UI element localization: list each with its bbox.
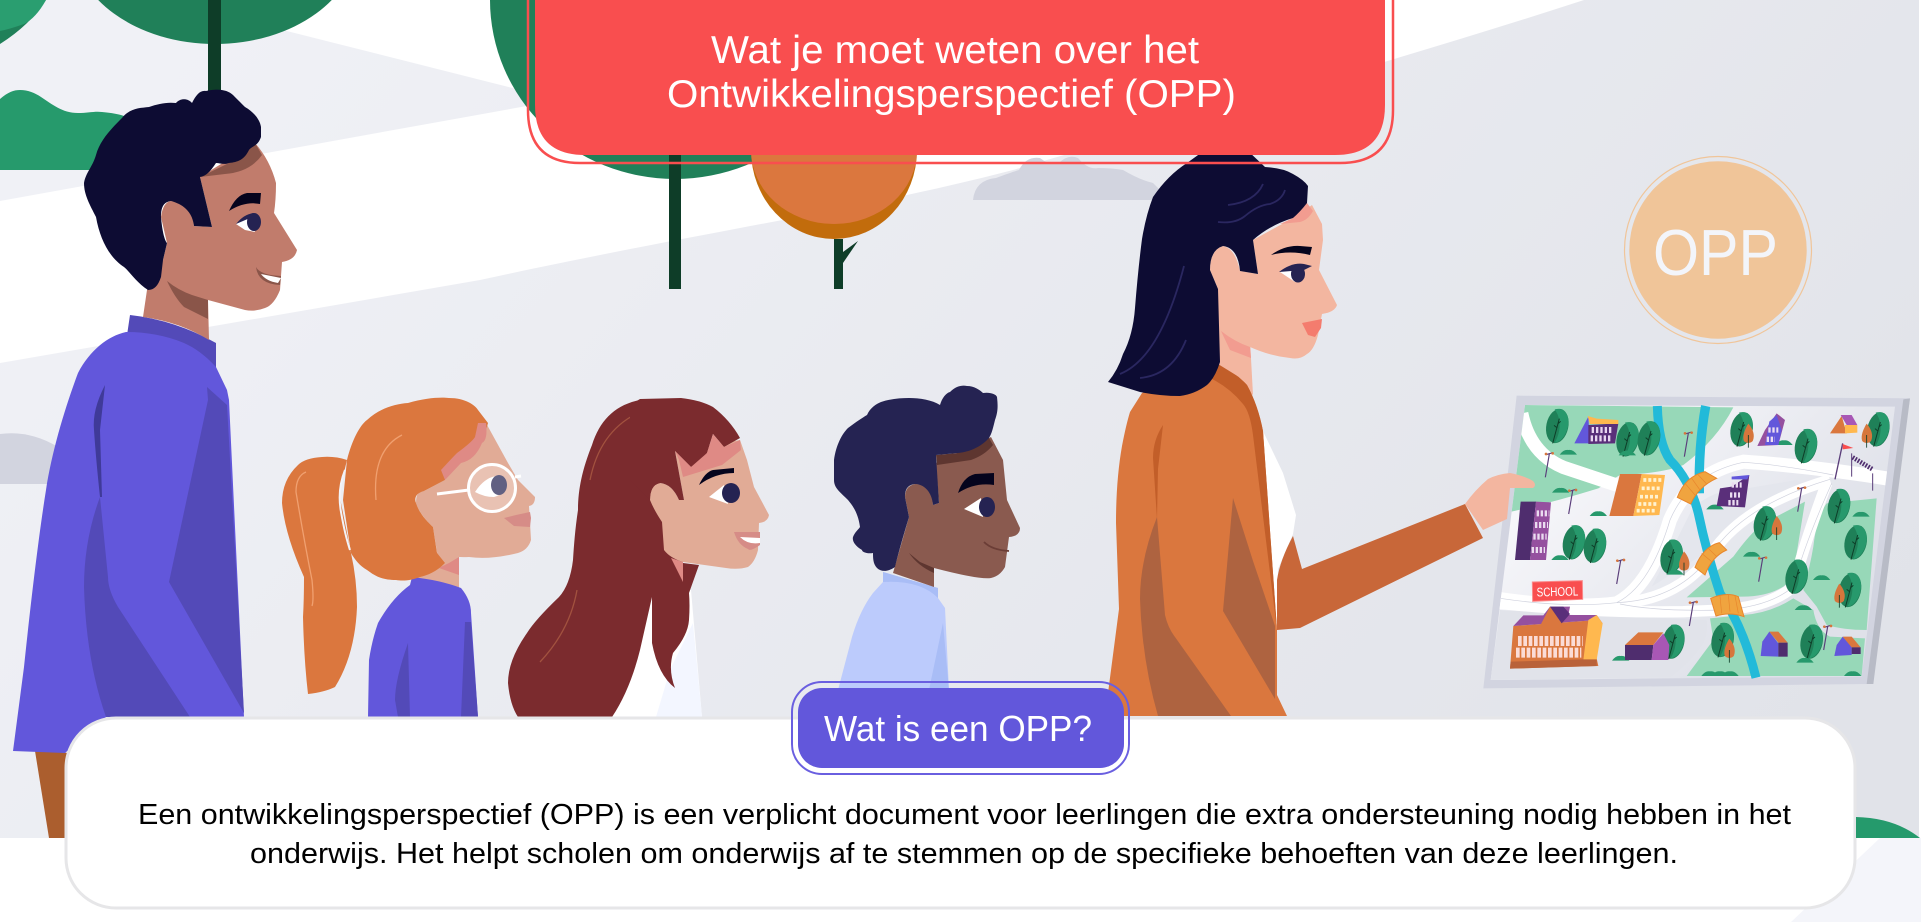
smile (984, 542, 1009, 551)
neck (412, 552, 459, 592)
section pill: Wat is een OPP? (824, 708, 1092, 749)
mouth (504, 512, 531, 527)
smile (734, 532, 760, 550)
long hair (508, 400, 699, 717)
face (650, 440, 769, 569)
hair (84, 90, 261, 290)
person: woman in orange jacket (1105, 150, 1483, 716)
building: tall purple (1515, 502, 1551, 560)
person: boy in light blue (834, 386, 1020, 690)
building: top centre tower (1757, 413, 1785, 446)
face (893, 437, 1020, 587)
section pill (792, 682, 1129, 774)
shirt (612, 590, 702, 717)
hair (834, 386, 998, 571)
shirt shading (169, 387, 244, 713)
hairline (675, 434, 741, 477)
shirt (368, 577, 478, 717)
hair highlights (540, 412, 640, 662)
building: top left purple (1574, 416, 1618, 444)
cloud: center (973, 157, 1170, 200)
OPP badge: OPP (1653, 216, 1778, 289)
eye (475, 476, 506, 497)
trousers (35, 751, 70, 838)
title line 1: Wat je moet weten over het (711, 29, 1199, 72)
eye and brow (1271, 246, 1312, 282)
banner fill (535, 0, 1385, 155)
river (1657, 406, 1756, 678)
bush: bottom right (1856, 817, 1920, 838)
gray ground (1491, 610, 1618, 680)
building: centre yellow (1609, 474, 1665, 516)
bush: left (0, 90, 130, 170)
shirt (13, 332, 244, 753)
hair highlight (376, 435, 402, 500)
roads (1483, 413, 1897, 612)
map frame (1483, 396, 1910, 688)
map bushes (1551, 440, 1870, 676)
info card (66, 718, 1855, 908)
ponytail highlight (296, 472, 313, 606)
building: bottom right houses (1761, 632, 1861, 657)
hair strands (1120, 184, 1285, 378)
person: man in purple (13, 90, 297, 838)
building: top right house (1830, 415, 1857, 433)
neck (671, 558, 683, 582)
shirt (1260, 429, 1296, 640)
collar (126, 315, 216, 372)
title banner (528, 0, 1393, 163)
map paper (1491, 405, 1895, 680)
smile (256, 267, 281, 285)
banner outline (528, 0, 1393, 163)
eye and brow (229, 193, 261, 232)
face and neck (143, 143, 297, 340)
sign: school (1532, 581, 1583, 601)
woman's hand over map (1465, 473, 1535, 530)
flag and finish (1835, 443, 1873, 491)
bridges (1677, 472, 1744, 617)
shirt (838, 572, 949, 690)
tree: top left small (0, 0, 46, 44)
building: centre-right (1717, 475, 1749, 507)
map lamps (1545, 431, 1832, 650)
hairline (441, 423, 486, 480)
person: girl with orange ponytail (282, 398, 535, 717)
road centre lines (1500, 462, 1833, 610)
map ground and roads, clipped to paper (1483, 405, 1897, 680)
map (1483, 396, 1910, 688)
hair (343, 398, 488, 581)
face (1210, 205, 1337, 385)
face (416, 423, 535, 558)
green areas (1503, 405, 1877, 676)
title line 2: Ontwikkelingsperspectief (OPP) (667, 73, 1236, 116)
hair (1108, 150, 1308, 396)
eye and brow (958, 473, 995, 517)
neck (1218, 289, 1253, 395)
eye and brow (699, 468, 740, 504)
body text line 2: onderwijs. Het helpt scholen om onderwijs af te stemmen op de specifieke behoeften van deze leerlingen. (250, 838, 1678, 870)
pale lower-right corner (1791, 838, 1921, 922)
hair top (630, 398, 740, 500)
cloud: left (0, 433, 58, 484)
tree: large top (72, 0, 358, 100)
tree: green behind title (490, 0, 860, 289)
map trees (1543, 407, 1893, 663)
OPP badge (1624, 156, 1812, 344)
lips (1302, 319, 1322, 337)
jacket (1105, 364, 1287, 716)
sign: school: SCHOOL (1536, 584, 1578, 600)
person: girl with long brown hair (508, 398, 769, 717)
body text line 1: Een ontwikkelingsperspectief (OPP) is een verplicht document voor leerlingen die extra ondersteuning nodig hebben in het (138, 799, 1791, 831)
tree: orange (751, 61, 917, 289)
building: bottom centre (1625, 632, 1669, 660)
arm (1277, 504, 1483, 630)
ponytail (282, 457, 357, 694)
building: school (1510, 607, 1603, 669)
glasses (437, 464, 521, 512)
ponytail gap (340, 470, 350, 550)
